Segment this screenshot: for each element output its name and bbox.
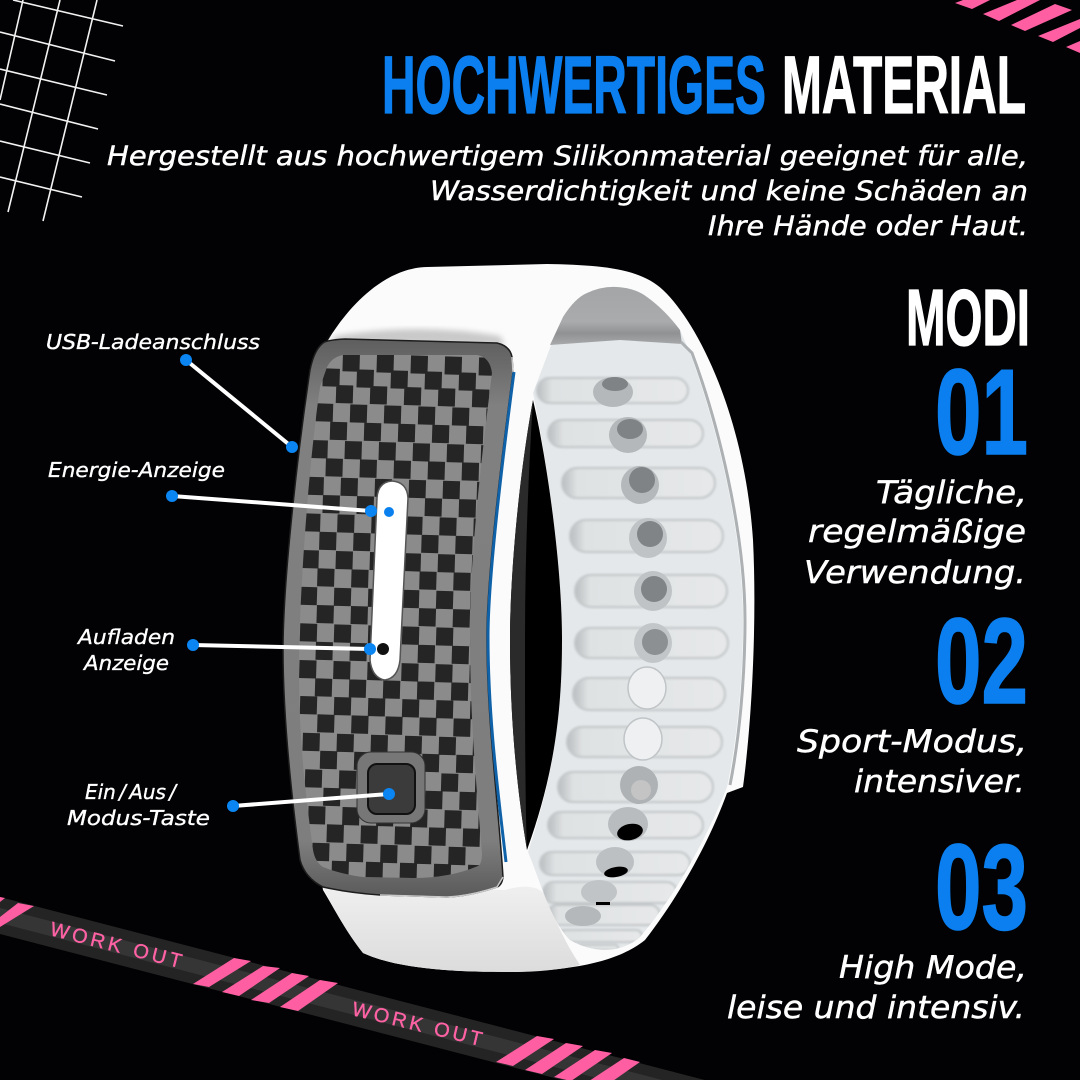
mode 01: regelmäßige — [808, 514, 1026, 550]
callout: Taste — [67, 780, 395, 830]
callout: Aufladen: Aufladen — [76, 625, 175, 649]
mode 02: 02 — [935, 593, 1028, 729]
mode 03: leise und intensiv. — [727, 990, 1025, 1026]
bezel highlight — [380, 357, 513, 897]
intro text: Wasserdichtigkeit und keine Schäden an — [430, 176, 1028, 207]
strap holes — [565, 377, 672, 926]
gap between band and strap — [510, 400, 562, 850]
tape label 1: WORK OUT — [48, 919, 184, 973]
mode 03 — [727, 819, 1028, 1026]
mode 02: intensiver. — [854, 764, 1025, 800]
mode 02 — [797, 593, 1028, 800]
callout: USB: USB-Ladeanschluss — [46, 330, 260, 354]
mode 01 — [804, 344, 1028, 591]
intro text: Ihre Hände oder Haut. — [708, 211, 1028, 242]
title: HOCHWERTIGES — [382, 40, 766, 131]
indicator dot blue — [384, 507, 394, 517]
callout: Aufladen — [76, 625, 376, 675]
bracelet — [280, 264, 754, 972]
blue edge — [488, 372, 514, 862]
dark inner strip — [510, 400, 533, 850]
callout: Taste: Ein / Aus / — [85, 780, 178, 804]
strap inner face — [528, 287, 745, 950]
callout: Taste: Modus-Taste — [67, 806, 210, 830]
strap right rim — [681, 342, 745, 785]
power button — [357, 752, 425, 823]
callout: Aufladen: Anzeige — [82, 651, 169, 675]
mode 01: 01 — [935, 344, 1028, 480]
mode 02: Sport-Modus, — [797, 724, 1027, 760]
workout tape — [0, 897, 720, 1080]
callout: Energie — [48, 458, 377, 517]
callout: Energie: Energie-Anzeige — [48, 458, 225, 482]
white slider — [370, 481, 408, 680]
intro text: Hergestellt aus hochwertigem Silikonmaterial geeignet für alle, — [107, 141, 1028, 172]
mode 03: High Mode, — [839, 950, 1027, 986]
pink stripes top right — [955, 0, 1080, 53]
tape band — [0, 897, 720, 1080]
grid decoration top left — [0, 0, 123, 221]
mode 03: 03 — [935, 819, 1028, 955]
indicator dot black — [377, 643, 389, 655]
mode 01: Tägliche, — [876, 475, 1027, 511]
outer white band — [300, 264, 754, 972]
metal bezel — [283, 339, 513, 897]
shadow above bezel — [330, 329, 505, 345]
tape stripes — [0, 897, 640, 1080]
checker panel — [299, 355, 492, 878]
lower band shading — [323, 887, 580, 972]
strap top shadow — [550, 287, 682, 345]
strap slots — [537, 378, 728, 950]
tape label 2: WORK OUT — [350, 998, 484, 1051]
callout: USB — [46, 330, 298, 453]
intro text — [107, 141, 1028, 242]
mode 01: Verwendung. — [804, 555, 1026, 591]
